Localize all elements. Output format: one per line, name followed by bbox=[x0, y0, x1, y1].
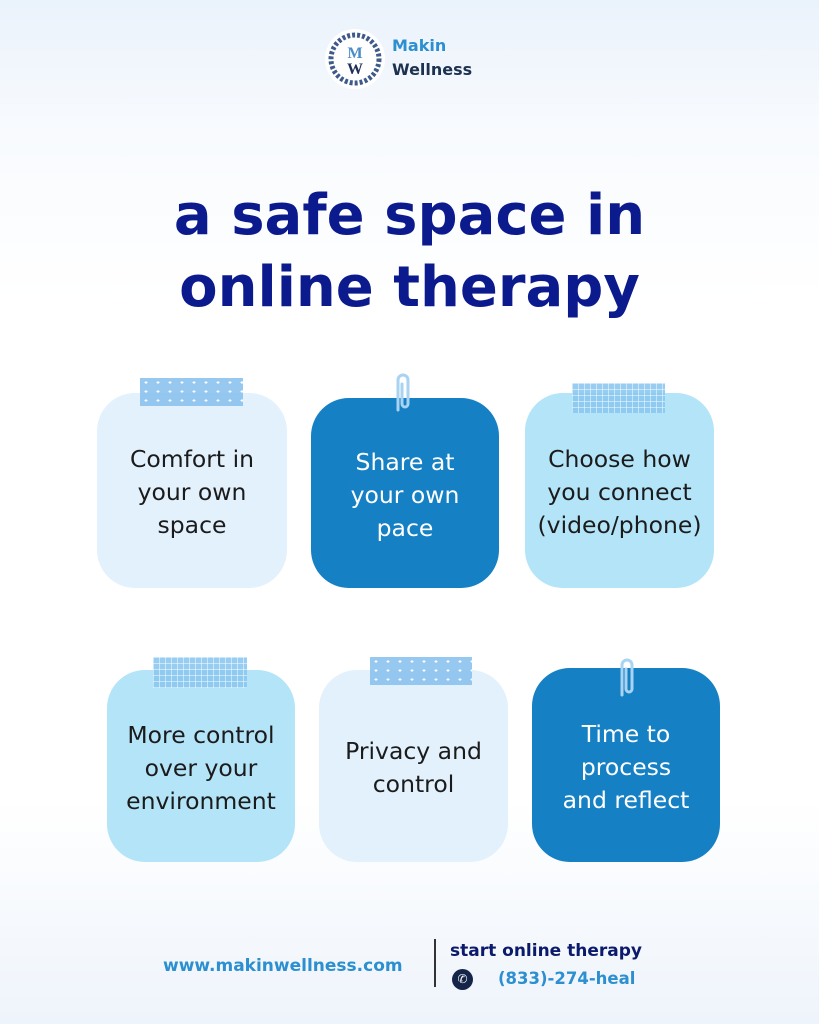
card: privacy: Privacy and bbox=[345, 737, 482, 765]
icon: laurel emblem: W bbox=[347, 61, 363, 78]
card: comfort bbox=[97, 393, 287, 588]
card: control: environment bbox=[126, 786, 276, 814]
card: time bbox=[532, 668, 720, 862]
card: comfort: Comfort in bbox=[130, 445, 254, 473]
card: time: and reflect bbox=[563, 786, 689, 814]
title: a safe space in bbox=[174, 183, 645, 248]
card: control bbox=[107, 670, 295, 862]
card: comfort: space bbox=[158, 511, 226, 539]
icon: laurel emblem bbox=[325, 29, 385, 89]
card: time: process bbox=[581, 752, 671, 780]
logo text bbox=[392, 36, 472, 79]
icon: phone: ✆ bbox=[457, 972, 468, 986]
tape 1 bbox=[140, 378, 243, 406]
card: comfort: your own bbox=[138, 478, 246, 506]
card: share: pace bbox=[377, 514, 433, 542]
cta: start online therapy bbox=[450, 941, 642, 961]
card: privacy: control bbox=[373, 770, 454, 798]
card: choose: you connect bbox=[547, 478, 692, 506]
icon: phone bbox=[452, 969, 473, 990]
icon: laurel emblem: M bbox=[347, 45, 363, 62]
card: control: over your bbox=[145, 754, 257, 782]
tape 5 bbox=[370, 657, 472, 685]
card: share: Share at bbox=[356, 448, 454, 476]
title bbox=[174, 183, 645, 320]
card: control: More control bbox=[127, 720, 275, 748]
phone number: (833)-274-heal bbox=[498, 969, 635, 988]
icon: paperclip 1 bbox=[396, 374, 410, 412]
title: online therapy bbox=[179, 255, 640, 320]
tape 4 bbox=[153, 657, 247, 688]
logo bbox=[325, 29, 472, 89]
icon: paperclip 2 bbox=[620, 658, 634, 696]
divider bbox=[434, 939, 436, 987]
tape 3 bbox=[572, 383, 665, 413]
footer bbox=[163, 939, 642, 990]
card: choose bbox=[525, 393, 714, 588]
logo text: Wellness bbox=[392, 60, 472, 79]
card: privacy bbox=[319, 670, 508, 862]
card: choose: Choose how bbox=[548, 445, 691, 473]
logo text: Makin bbox=[392, 36, 446, 55]
card: time: Time to bbox=[582, 720, 670, 748]
card: share: your own bbox=[351, 480, 459, 508]
website: www.makinwellness.com bbox=[163, 956, 403, 976]
card: share bbox=[311, 398, 499, 588]
card: choose: (video/phone) bbox=[538, 511, 701, 539]
